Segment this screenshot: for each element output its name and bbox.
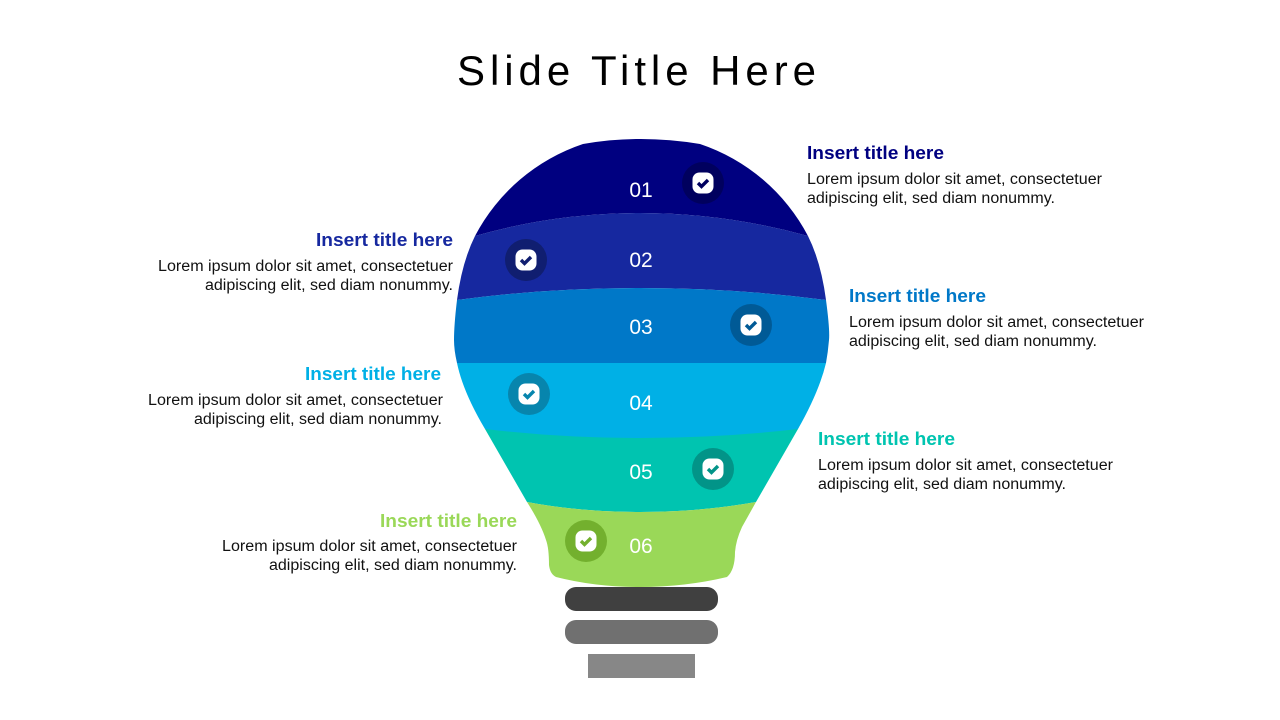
text block 05: Insert title here (818, 429, 955, 449)
text block 01 (807, 143, 1102, 207)
text block 05 (818, 429, 1113, 493)
segment 05 (485, 429, 798, 512)
text block 01: adipiscing elit, sed diam nonummy. (807, 190, 1055, 207)
text block 01: Insert title here (807, 143, 944, 163)
segment 06: 06 (629, 535, 653, 558)
text block 03: Insert title here (849, 286, 986, 306)
text block 06: Lorem ipsum dolor sit amet, consectetuer (222, 538, 517, 555)
text block 03: adipiscing elit, sed diam nonummy. (849, 333, 1097, 350)
text block 02 (158, 230, 453, 294)
text block 04: Lorem ipsum dolor sit amet, consectetuer (148, 392, 443, 409)
segment 03: 03 (629, 316, 653, 339)
segment 01: 01 (629, 179, 653, 202)
icon: check badge 03 (730, 304, 772, 346)
text block 04: Insert title here (305, 364, 441, 384)
icon: check badge 05 (692, 448, 734, 490)
text block 02: adipiscing elit, sed diam nonummy. (205, 277, 453, 294)
segment 04 (457, 363, 826, 438)
icon: check badge 06 (565, 520, 607, 562)
base block: light (588, 654, 695, 678)
segment 03 (454, 288, 829, 363)
base bar: dark (565, 587, 718, 611)
text block 05: Lorem ipsum dolor sit amet, consectetuer (818, 457, 1113, 474)
segment 06 (527, 502, 756, 587)
text block 06: Insert title here (380, 511, 517, 531)
icon: check badge 04 (508, 373, 550, 415)
text block 02: Insert title here (316, 230, 453, 250)
icon: check badge 02 (505, 239, 547, 281)
segment 01 (475, 139, 808, 236)
base bar: medium (565, 620, 718, 644)
segment 04: 04 (629, 392, 653, 415)
text block 02: Lorem ipsum dolor sit amet, consectetuer (158, 258, 453, 275)
text block 03: Lorem ipsum dolor sit amet, consectetuer (849, 314, 1144, 331)
segment 02: 02 (629, 249, 653, 272)
icon: check badge 01 (682, 162, 724, 204)
lightbulb diagram (454, 139, 829, 678)
segment 05: 05 (629, 461, 653, 484)
text block 05: adipiscing elit, sed diam nonummy. (818, 476, 1066, 493)
text block 01: Lorem ipsum dolor sit amet, consectetuer (807, 171, 1102, 188)
text block 06: adipiscing elit, sed diam nonummy. (269, 557, 517, 574)
text block 03 (849, 286, 1144, 350)
text block 04 (148, 364, 443, 428)
text block 04: adipiscing elit, sed diam nonummy. (194, 411, 442, 428)
segment 02 (457, 213, 826, 300)
text block 06 (222, 511, 517, 574)
title: Slide Title Here (457, 47, 816, 94)
